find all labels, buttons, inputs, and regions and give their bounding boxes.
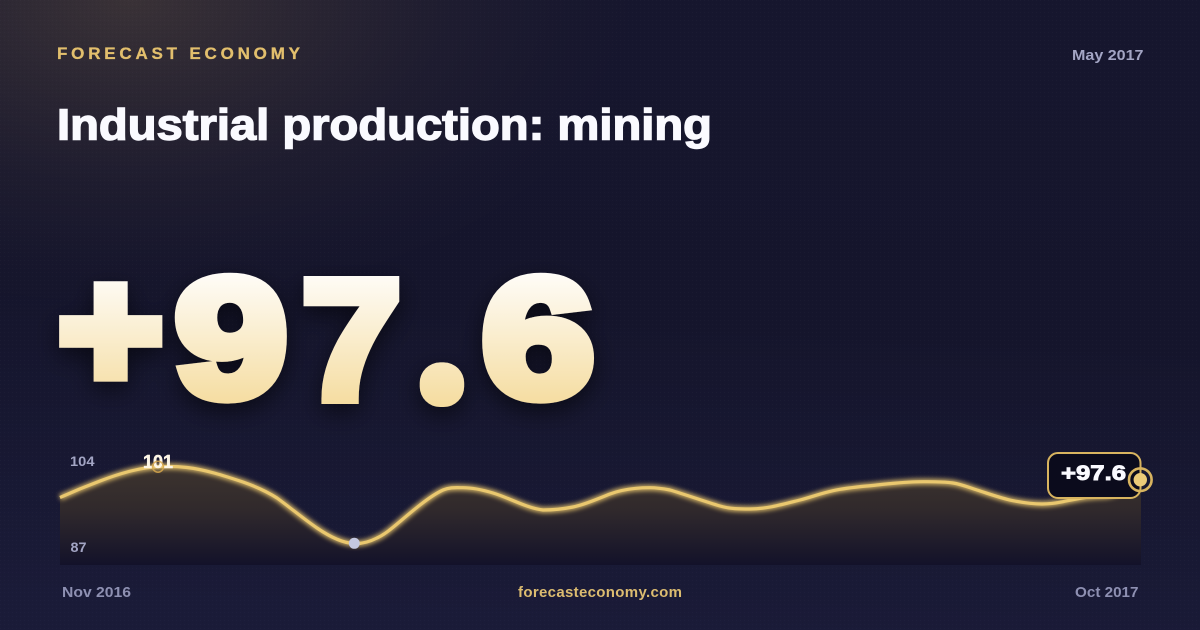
minimum marker — [349, 538, 360, 549]
hero value: 9 — [175, 245, 287, 432]
hero value: . — [439, 366, 445, 393]
hero value: 6 — [482, 245, 594, 432]
chart area fill — [60, 466, 1141, 565]
hero value — [59, 234, 594, 435]
peak value label: 101 — [143, 451, 173, 472]
axis max label: 104 — [70, 453, 95, 469]
line glow — [60, 466, 1141, 544]
end date label: Oct 2017 — [1075, 584, 1138, 601]
axis min label: 87 — [70, 539, 87, 555]
hero value: + — [59, 234, 162, 424]
current value callout: +97.6 — [1061, 462, 1126, 485]
current value callout — [1048, 453, 1140, 498]
peak marker — [152, 461, 164, 472]
date: May 2017 — [1072, 47, 1144, 64]
data line — [60, 466, 1141, 544]
brand label: FORECAST ECONOMY — [57, 44, 301, 63]
hero value: 7 — [302, 246, 401, 435]
current value marker — [1129, 468, 1152, 491]
title: Industrial production: mining — [57, 100, 712, 150]
start date label: Nov 2016 — [62, 584, 131, 601]
sparkline chart — [60, 451, 1152, 565]
website: forecasteconomy.com — [518, 584, 682, 601]
